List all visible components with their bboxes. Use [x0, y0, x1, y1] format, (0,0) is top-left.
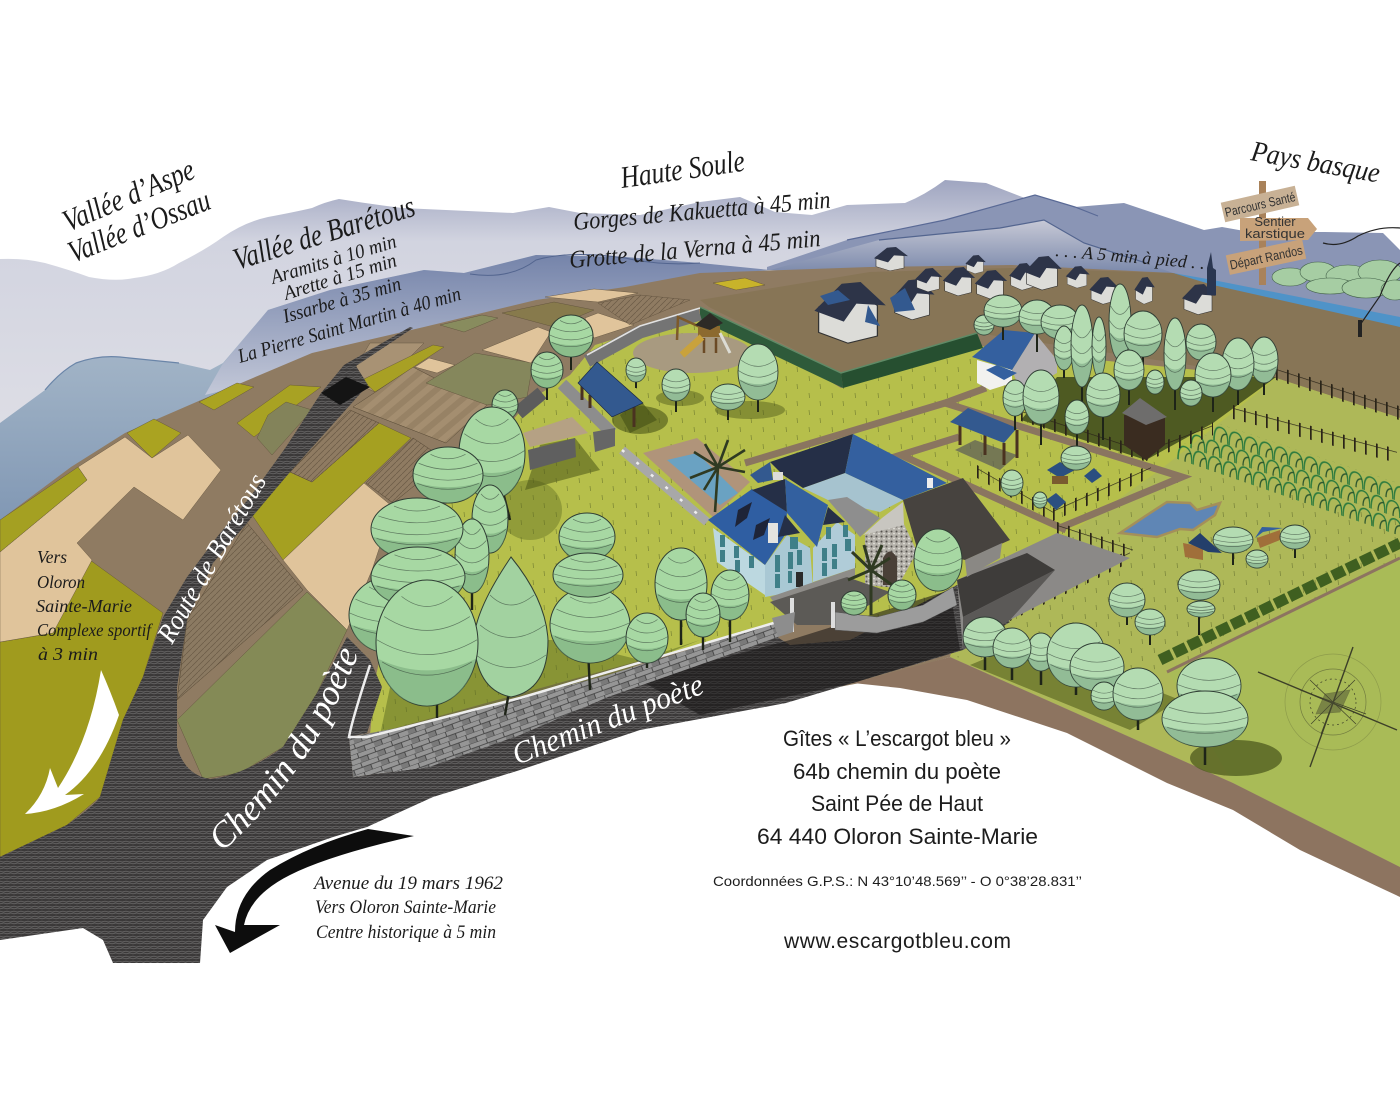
address block	[757, 726, 1038, 849]
road fence	[1057, 522, 1133, 560]
region label: Vallée de Barétous: Vallée de Barétous	[229, 188, 419, 277]
shutters	[720, 525, 851, 588]
sign: Sentier karstique: Sentier	[1254, 214, 1296, 229]
brown hedged field with village	[700, 268, 1400, 418]
note: towards Oloron Sainte-Marie	[36, 547, 154, 664]
fences	[977, 366, 1400, 621]
note: avenue du 19 mars 1962: Centre historique à 5 min	[316, 922, 496, 943]
address block: Saint Pée de Haut	[811, 791, 983, 816]
website: www.escargotbleu.com	[783, 930, 1011, 953]
pen fence right	[1053, 464, 1151, 521]
road label: Chemin du poète vertical: Chemin du poète	[213, 648, 356, 848]
back mountain range	[0, 180, 1400, 460]
address block: 64 440 Oloron Sainte-Marie	[757, 824, 1038, 849]
region label: Haute Soule: Haute Soule	[617, 143, 747, 195]
orchard fence	[1021, 408, 1146, 462]
road fence lower	[1010, 549, 1130, 621]
trees: rear orchard	[974, 284, 1278, 450]
trees: upper lawn	[531, 315, 778, 420]
compass rose	[1258, 647, 1397, 767]
brown road strip	[853, 657, 1400, 897]
orchard fence right	[1146, 422, 1213, 461]
pen huts	[1046, 462, 1283, 560]
pen fence	[977, 465, 1053, 522]
sign: Sentier karstique: karstique	[1245, 226, 1305, 241]
road label: Chemin du poète horizontal: Chemin du poète	[507, 666, 708, 772]
main farmhouse	[708, 434, 947, 597]
rear wing	[750, 434, 947, 537]
road network	[0, 327, 1130, 963]
farmland fields	[0, 278, 765, 857]
destination: Grotte de la Verna: Grotte de la Verna à 45 min	[568, 225, 822, 274]
trees: large left cluster	[349, 390, 962, 718]
palm by barn	[848, 545, 892, 615]
pond	[1120, 502, 1220, 537]
white arrow	[25, 670, 119, 814]
village houses	[814, 247, 1216, 343]
region label: Vallée d'Aspe: Vallée d’Aspe	[57, 151, 200, 238]
distant tree line	[1272, 260, 1400, 300]
vine arches row 3	[1177, 441, 1400, 536]
house roof	[708, 472, 845, 565]
road label: Route de Barétous: Route de Barétous	[151, 468, 273, 649]
stone barn	[863, 478, 1010, 588]
region label: Pays basque: Pays basque	[1248, 135, 1382, 189]
upper stone walls and gravel	[518, 308, 707, 522]
church spire	[1207, 252, 1216, 295]
playground	[633, 313, 751, 373]
lawns	[370, 310, 1400, 867]
rear barn	[972, 330, 1057, 393]
address block: 64b chemin du poète	[793, 759, 1001, 784]
land base	[0, 265, 1400, 867]
open shelter	[950, 408, 1017, 470]
destination: Aramits: Aramits à 10 min	[266, 231, 399, 289]
destination: Arette: Arette à 15 min	[279, 250, 399, 305]
vine fence	[1233, 405, 1397, 463]
left foreground mountains	[0, 254, 780, 530]
note: avenue du 19 mars 1962	[312, 873, 503, 943]
note: towards Oloron Sainte-Marie: Complexe sportif	[37, 620, 154, 640]
sign: Sentier karstique	[1240, 214, 1317, 241]
signpost	[1221, 181, 1317, 285]
note: avenue du 19 mars 1962: Vers Oloron Sainte-Marie	[315, 897, 496, 918]
trees: front row lower right	[963, 617, 1282, 776]
river	[1173, 273, 1400, 327]
sign: Parcours Santé: Parcours Santé	[1223, 189, 1297, 220]
low vine row	[1160, 543, 1400, 660]
hedge around field	[700, 307, 983, 388]
courtyard paving and garden wall	[770, 568, 957, 637]
destination: La Pierre Saint Martin: La Pierre Saint Martin à 40 min	[234, 283, 463, 368]
palm by pool	[690, 440, 745, 512]
shed near wall	[578, 362, 657, 433]
house walls	[713, 522, 855, 597]
address block: Gîtes « L’escargot bleu »	[783, 726, 1011, 751]
vineyard rows	[1160, 422, 1400, 672]
label: walking distance: . . . A 5 min à pied . .	[1055, 240, 1206, 273]
swimming pool	[643, 438, 750, 517]
vine arches row 2	[1190, 430, 1400, 518]
top fence	[1276, 366, 1400, 420]
GPS coordinates: Coordonnées G.P.S.: N 43°10’48.569’’ - O 0°38’28.831’’	[713, 873, 1082, 889]
note: towards Oloron Sainte-Marie: Vers	[37, 547, 67, 567]
region label: Vallée d'Ossau: Vallée d’Ossau	[63, 182, 215, 270]
trees: pen and meadow	[1001, 446, 1310, 645]
destination: Gorges de Kakuetta: Gorges de Kakuetta à 45 min	[572, 187, 832, 236]
vine arches row 1	[1213, 422, 1400, 502]
note: avenue du 19 mars 1962: Avenue du 19 mars 1962	[312, 873, 503, 894]
sign: Départ Randos: Départ Randos	[1228, 242, 1304, 273]
brown lanes	[745, 388, 1182, 530]
stone perimeter wall	[349, 622, 779, 777]
note: towards Oloron Sainte-Marie: Sainte-Marie	[36, 596, 132, 616]
black arrow	[215, 829, 414, 953]
destination: Issarbe: Issarbe à 35 min	[279, 273, 404, 328]
fisherman and line	[1323, 228, 1400, 337]
note: towards Oloron Sainte-Marie: Oloron	[37, 572, 85, 592]
note: towards Oloron Sainte-Marie: à 3 min	[38, 644, 98, 664]
small shed in orchard	[1122, 398, 1167, 460]
